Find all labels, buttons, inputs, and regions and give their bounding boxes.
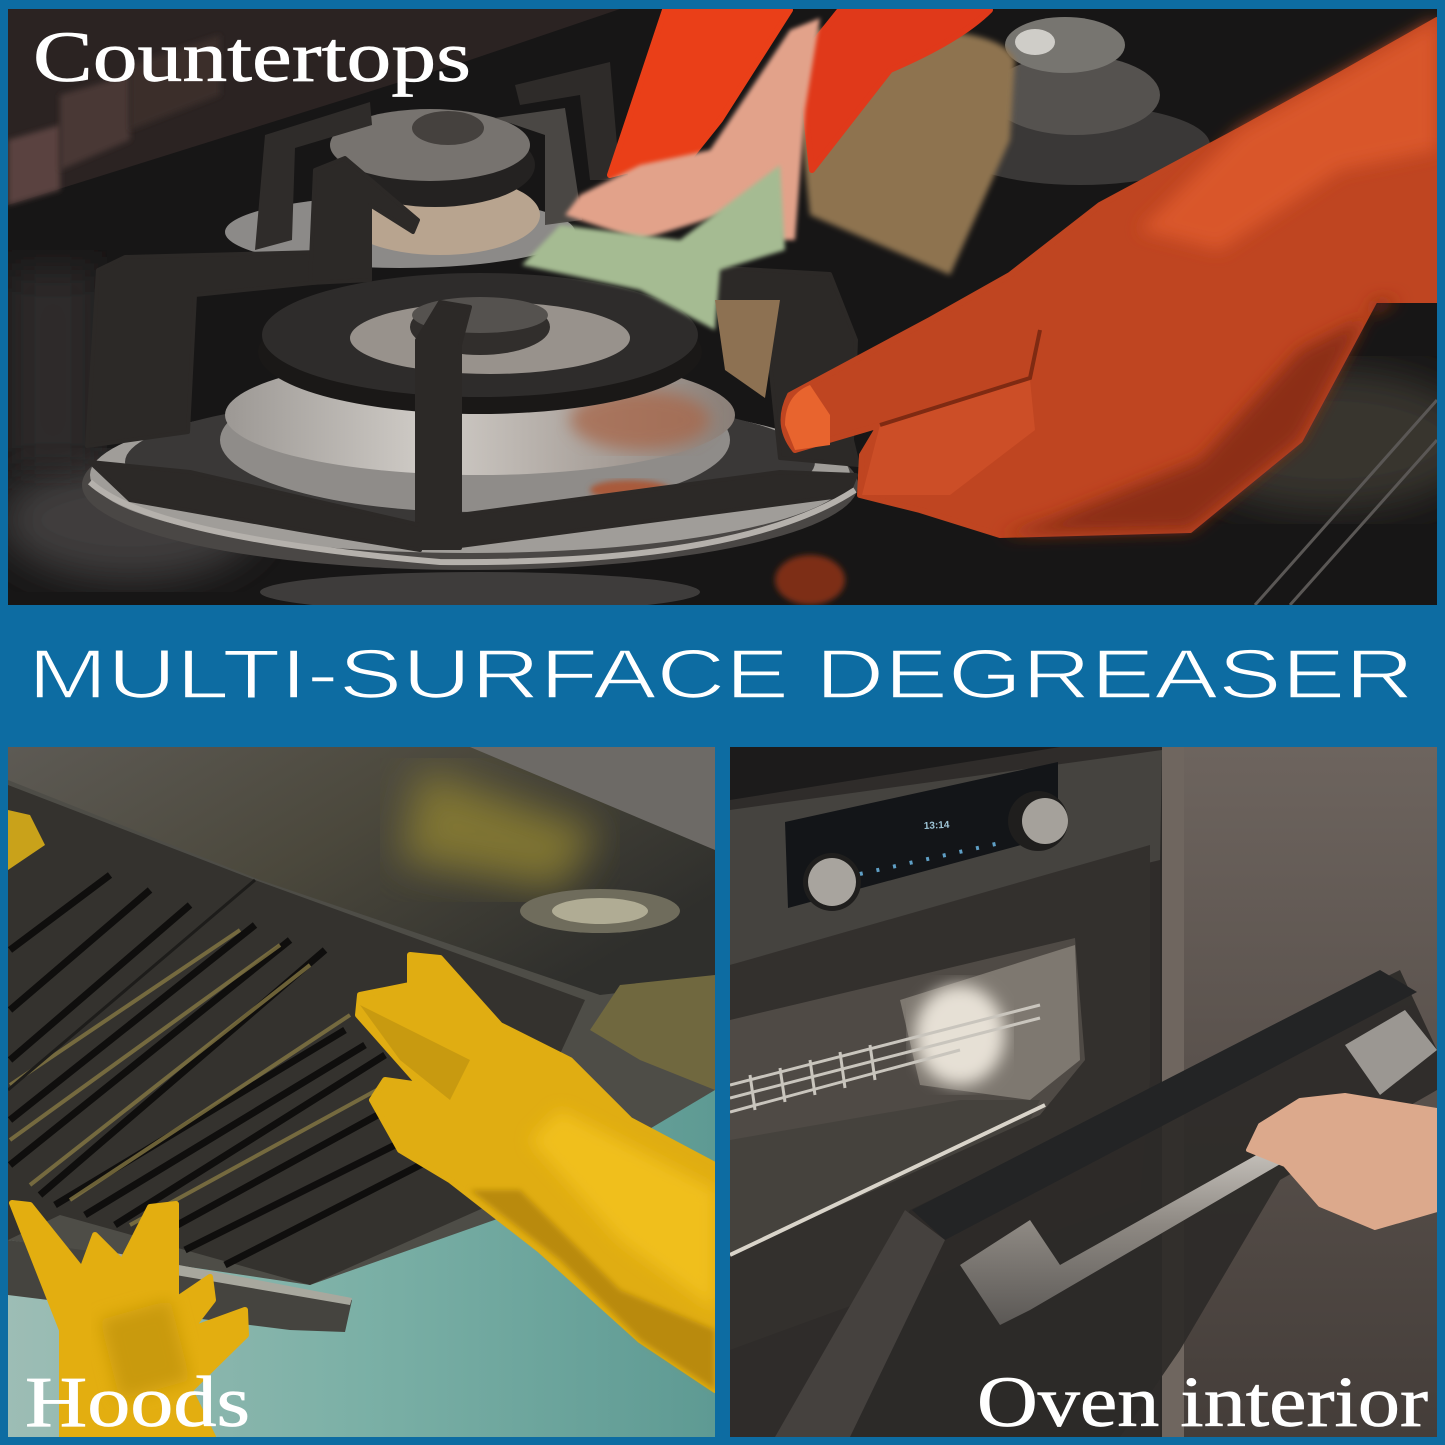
hood light [520, 889, 680, 933]
main burner base [82, 273, 858, 570]
panel: oven interior photo [730, 747, 1437, 1437]
hood underside [8, 785, 585, 1285]
small yellow reflection [8, 810, 45, 870]
burner reflection [260, 572, 700, 605]
rear right burner [992, 17, 1210, 185]
lower hand with orange glove [784, 20, 1437, 535]
display icons [859, 842, 996, 876]
panel: countertops photo [0, 9, 1445, 612]
hood filter slats [10, 875, 430, 1265]
cabinet wall [1180, 747, 1437, 1437]
door handle [960, 1155, 1279, 1325]
left knob [803, 853, 861, 911]
upper hand with red glove [522, 10, 1015, 398]
hood side panel [8, 747, 715, 1285]
oven rack [730, 1005, 1040, 1112]
filter seam [8, 880, 255, 1090]
right yellow glove [358, 955, 715, 1390]
label: Hoods: Hoods [25, 1362, 250, 1442]
title: MULTI-SURFACE DEGREASER [28, 635, 1414, 713]
hood bottom shelf [8, 1240, 352, 1332]
counter edge [1255, 400, 1437, 605]
control panel [730, 750, 1162, 965]
range hood top [8, 747, 715, 995]
display time: 13:14 [924, 820, 950, 832]
oven floor [730, 1100, 1040, 1255]
stove rim highlight [90, 482, 855, 562]
oven cavity [734, 845, 1150, 964]
display [785, 762, 1058, 908]
dusty counter reflections [0, 460, 260, 580]
rear left burner [225, 62, 620, 268]
oven door [775, 970, 1437, 1437]
left yellow glove [12, 1203, 246, 1437]
right knob [1008, 791, 1068, 851]
pan support grate [87, 158, 858, 550]
oven frame [730, 747, 1160, 1437]
label: Countertops: Countertops [33, 17, 471, 97]
backsplash tiles [8, 9, 620, 205]
panel: hoods photo [8, 747, 715, 1437]
hand [1248, 1095, 1437, 1228]
label: Oven interior: Oven interior [977, 1362, 1428, 1442]
